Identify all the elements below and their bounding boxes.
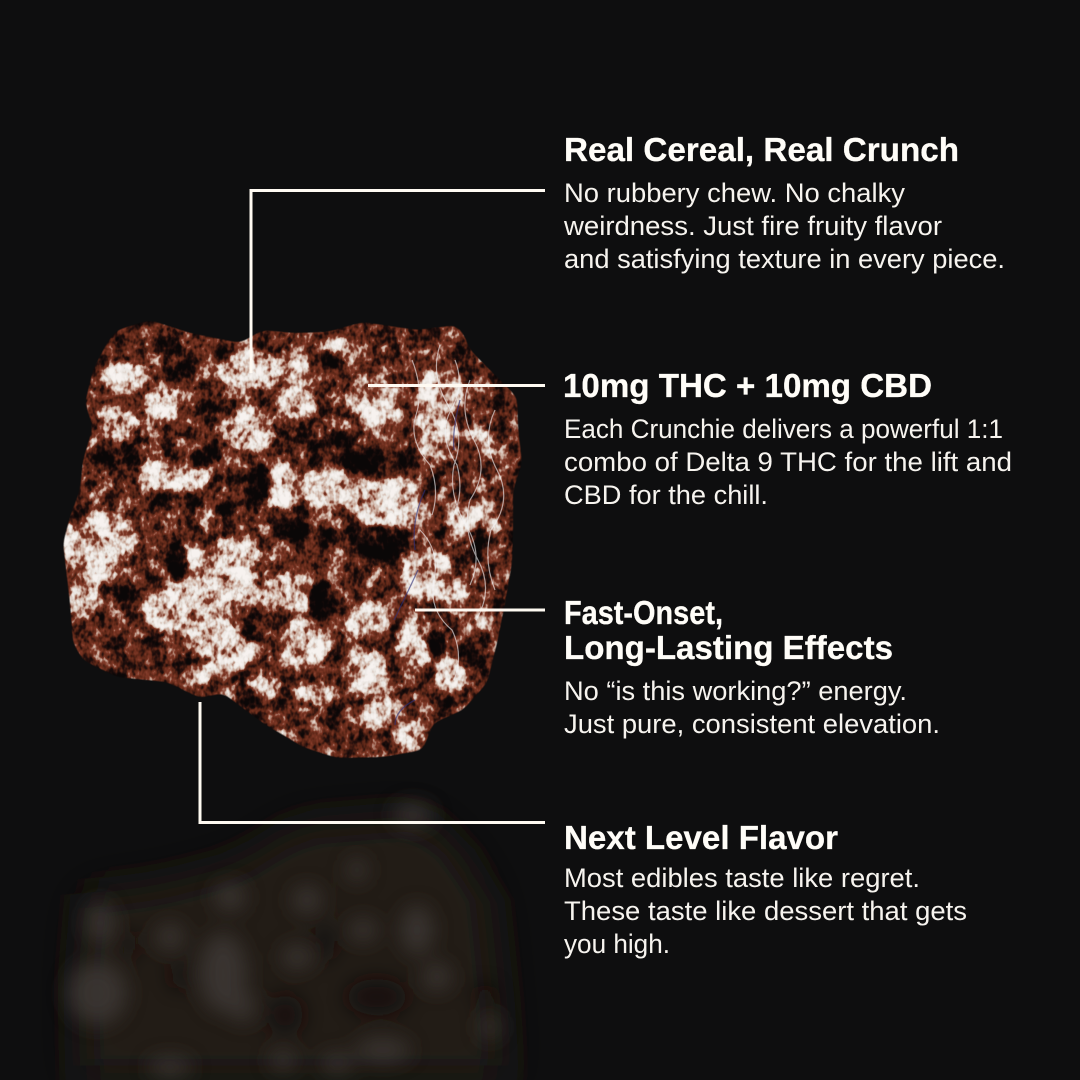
text block: 10mg THC + 10mg CBD: Each Crunchie delivers a powerful 1:1 [564,414,1003,444]
text block: Next Level Flavor [564,819,967,959]
text block: Next Level Flavor: These taste like dessert that gets [564,896,967,926]
text block: Fast-Onset, Long-Lasting Effects: No “is this working?” energy. [564,676,907,706]
text block: 10mg THC + 10mg CBD [563,367,1012,510]
text block: Real Cereal, Real Crunch: weirdness. Just fire fruity flavor [563,211,942,241]
text block: Real Cereal, Real Crunch: and satisfying texture in every piece. [564,244,1005,274]
text block: 10mg THC + 10mg CBD: CBD for the chill. [564,480,768,510]
callout line: Next Level Flavor [200,702,545,822]
text block: 10mg THC + 10mg CBD: combo of Delta 9 THC for the lift and [564,447,1012,477]
text block: Fast-Onset, Long-Lasting Effects: Long-Lasting Effects [564,629,893,666]
text block: Next Level Flavor: you high. [564,929,670,959]
glassy sugar strands [412,345,504,680]
callout line: Real Cereal [251,190,545,373]
callout line: Fast-Onset [415,608,545,612]
callout line: THC + CBD [368,384,545,387]
text block: Real Cereal, Real Crunch: No rubbery chew. No chalky [564,178,906,208]
text block: Real Cereal, Real Crunch [563,131,1005,274]
text block: Fast-Onset, Long-Lasting Effects [564,594,940,739]
text block: Fast-Onset, Long-Lasting Effects: Just pure, consistent elevation. [564,709,940,739]
text block: Next Level Flavor: Next Level Flavor [564,819,838,856]
product image: crunchie [50,310,530,770]
text block: Real Cereal, Real Crunch: Real Cereal, Real Crunch [564,131,959,168]
text block: Fast-Onset, Long-Lasting Effects: Fast-Onset, [564,594,723,631]
text block: Next Level Flavor: Most edibles taste like regret. [564,863,920,893]
text block: 10mg THC + 10mg CBD: 10mg THC + 10mg CBD [563,367,932,404]
blurred reflection of the crunchie [67,803,505,1080]
